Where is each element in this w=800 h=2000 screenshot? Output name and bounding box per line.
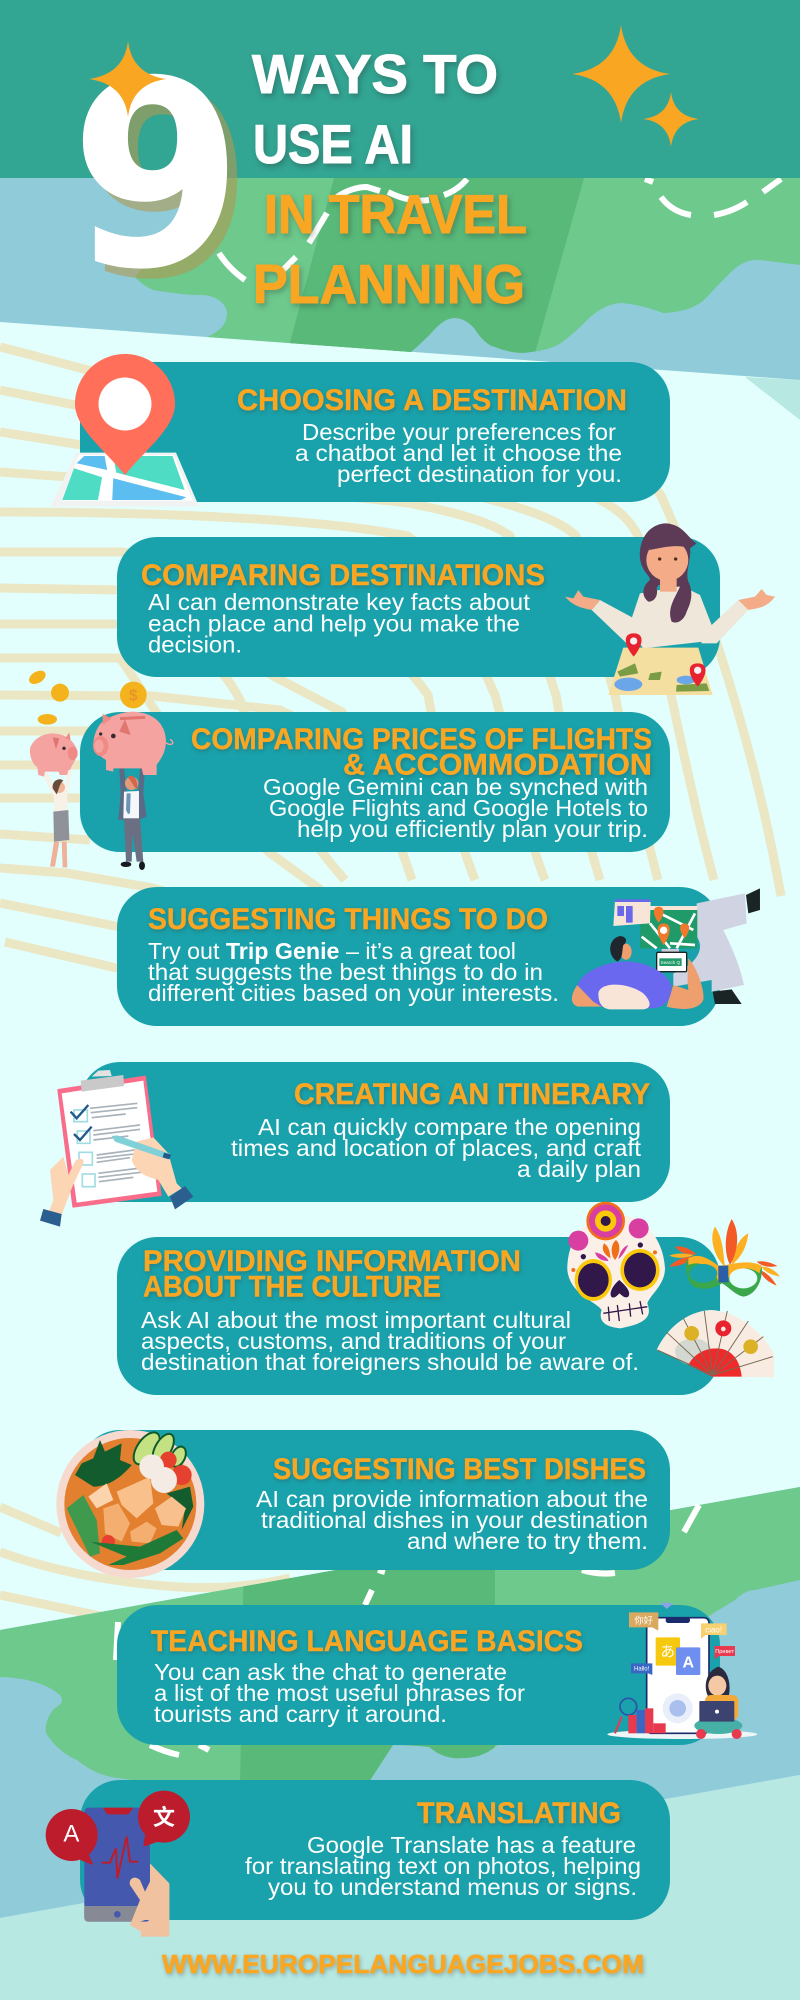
heading: PROVIDING INFORMATION <box>143 1245 521 1278</box>
text block: you to understand menus or signs. <box>268 1874 637 1900</box>
panel: translating <box>46 1780 670 1937</box>
text block: each place and help you make the <box>148 610 520 636</box>
header band <box>0 0 800 178</box>
text block: different cities based on your interests. <box>148 980 559 1006</box>
icon: phone with language cards and girl: A <box>683 1655 695 1672</box>
heading: CHOOSING A DESTINATION <box>237 384 627 417</box>
icon: map with pin <box>50 354 199 507</box>
text block: perfect destination for you. <box>337 461 622 487</box>
text block <box>231 1114 642 1182</box>
icon: woman with map <box>565 523 775 695</box>
icon: carnival mask <box>669 1219 780 1297</box>
heading: SUGGESTING BEST DISHES <box>273 1453 646 1486</box>
map background: top <box>0 178 800 420</box>
text block <box>245 1832 641 1900</box>
text block: AI can quickly compare the opening <box>258 1114 641 1140</box>
title: PLANNING <box>253 253 525 315</box>
text block: traditional dishes in your destination <box>261 1507 648 1533</box>
icon: clipboard checklist <box>40 1070 193 1227</box>
panel: comparing prices <box>27 668 670 870</box>
text block: for translating text on photos, helping <box>245 1853 641 1879</box>
title: USE AI <box>253 113 413 175</box>
icon: folding fan <box>657 1310 774 1377</box>
icon: man planning with map <box>572 888 760 1009</box>
title: WAYS TO <box>252 43 498 105</box>
text block: Google Flights and Google Hotels to <box>269 795 648 821</box>
text block: decision. <box>148 632 242 658</box>
text block: Ask AI about the most important cultural <box>141 1307 571 1333</box>
text block: AI can provide information about the <box>256 1486 648 1512</box>
text block <box>141 1307 639 1375</box>
text block: You can ask the chat to generate <box>154 1659 507 1685</box>
text block: times and location of places, and craft <box>231 1135 642 1161</box>
heading: SUGGESTING THINGS TO DO <box>148 903 548 936</box>
text block: Google Gemini can be synched with <box>263 774 648 800</box>
panel: teaching language basics <box>117 1602 757 1745</box>
heading <box>143 1245 521 1304</box>
sparkles <box>89 25 699 147</box>
text block: that suggests the best things to do in <box>148 959 543 985</box>
text block: a chatbot and let it choose the <box>295 440 622 466</box>
icon: food bowl <box>56 1428 204 1578</box>
icon: phone with language cards and girl: ciao! <box>705 1625 722 1634</box>
icon: phone with language cards and girl <box>607 1602 757 1739</box>
panel: choosing a destination <box>50 354 670 507</box>
background stripes <box>0 347 781 1618</box>
text block <box>256 1486 648 1554</box>
text block: Try out Trip Genie – it’s a great tool <box>148 938 516 964</box>
heading: ABOUT THE CULTURE <box>143 1270 441 1304</box>
big number 9: 9 <box>80 36 253 336</box>
icon: phone with language cards and girl: Hallo! <box>634 1666 650 1672</box>
icon: phone with language cards and girl: Привет <box>715 1649 734 1655</box>
text block: Describe your preferences for <box>302 419 616 445</box>
text block <box>263 774 648 842</box>
text block: help you efficiently plan your trip. <box>297 816 648 842</box>
text block: AI can demonstrate key facts about <box>148 589 531 615</box>
icon: people lifting piggy banks <box>27 668 173 870</box>
text block: a list of the most useful phrases for <box>154 1680 525 1706</box>
map background: bottom <box>0 1480 800 2000</box>
panel: providing information about the culture <box>117 1202 780 1395</box>
heading: COMPARING DESTINATIONS <box>141 559 545 592</box>
text block: tourists and carry it around. <box>154 1701 447 1727</box>
panel: creating an itinerary <box>40 1062 670 1227</box>
icon: people lifting piggy banks: $ <box>129 688 138 705</box>
title <box>252 43 527 315</box>
icon: phone with translation bubbles: 文 <box>153 1805 175 1830</box>
panel: comparing destinations <box>117 523 775 695</box>
heading: CREATING AN ITINERARY <box>294 1078 650 1111</box>
big number 9: 9 <box>70 26 243 326</box>
text block <box>148 938 559 1006</box>
icon: phone with translation bubbles <box>46 1791 190 1937</box>
icon: phone with language cards and girl: あ <box>660 1644 675 1661</box>
text block <box>154 1659 525 1727</box>
title: IN TRAVEL <box>264 183 527 245</box>
icon: phone with language cards and girl: 你好 <box>634 1614 653 1625</box>
text block: a daily plan <box>517 1156 641 1182</box>
text block: destination that foreigners should be aware of. <box>141 1349 639 1375</box>
text block <box>148 589 531 658</box>
heading: TEACHING LANGUAGE BASICS <box>151 1625 583 1658</box>
footer url: WWW.EUROPELANGUAGEJOBS.COM <box>162 1949 644 1979</box>
text block: Google Translate has a feature <box>307 1832 636 1858</box>
text block: and where to try them. <box>407 1528 648 1554</box>
text block <box>295 419 622 487</box>
text block: aspects, customs, and traditions of your <box>141 1328 566 1354</box>
heading: & ACCOMMODATION <box>343 748 652 782</box>
heading: TRANSLATING <box>417 1797 621 1830</box>
panel: suggesting things to do <box>117 887 760 1026</box>
heading: COMPARING PRICES OF FLIGHTS <box>191 723 652 756</box>
icon: phone with translation bubbles: A <box>63 1821 79 1848</box>
icon: sugar skull <box>567 1202 665 1328</box>
icon: man planning with map: Search Q <box>660 960 681 965</box>
panel: suggesting best dishes <box>56 1428 670 1578</box>
heading <box>191 723 652 782</box>
